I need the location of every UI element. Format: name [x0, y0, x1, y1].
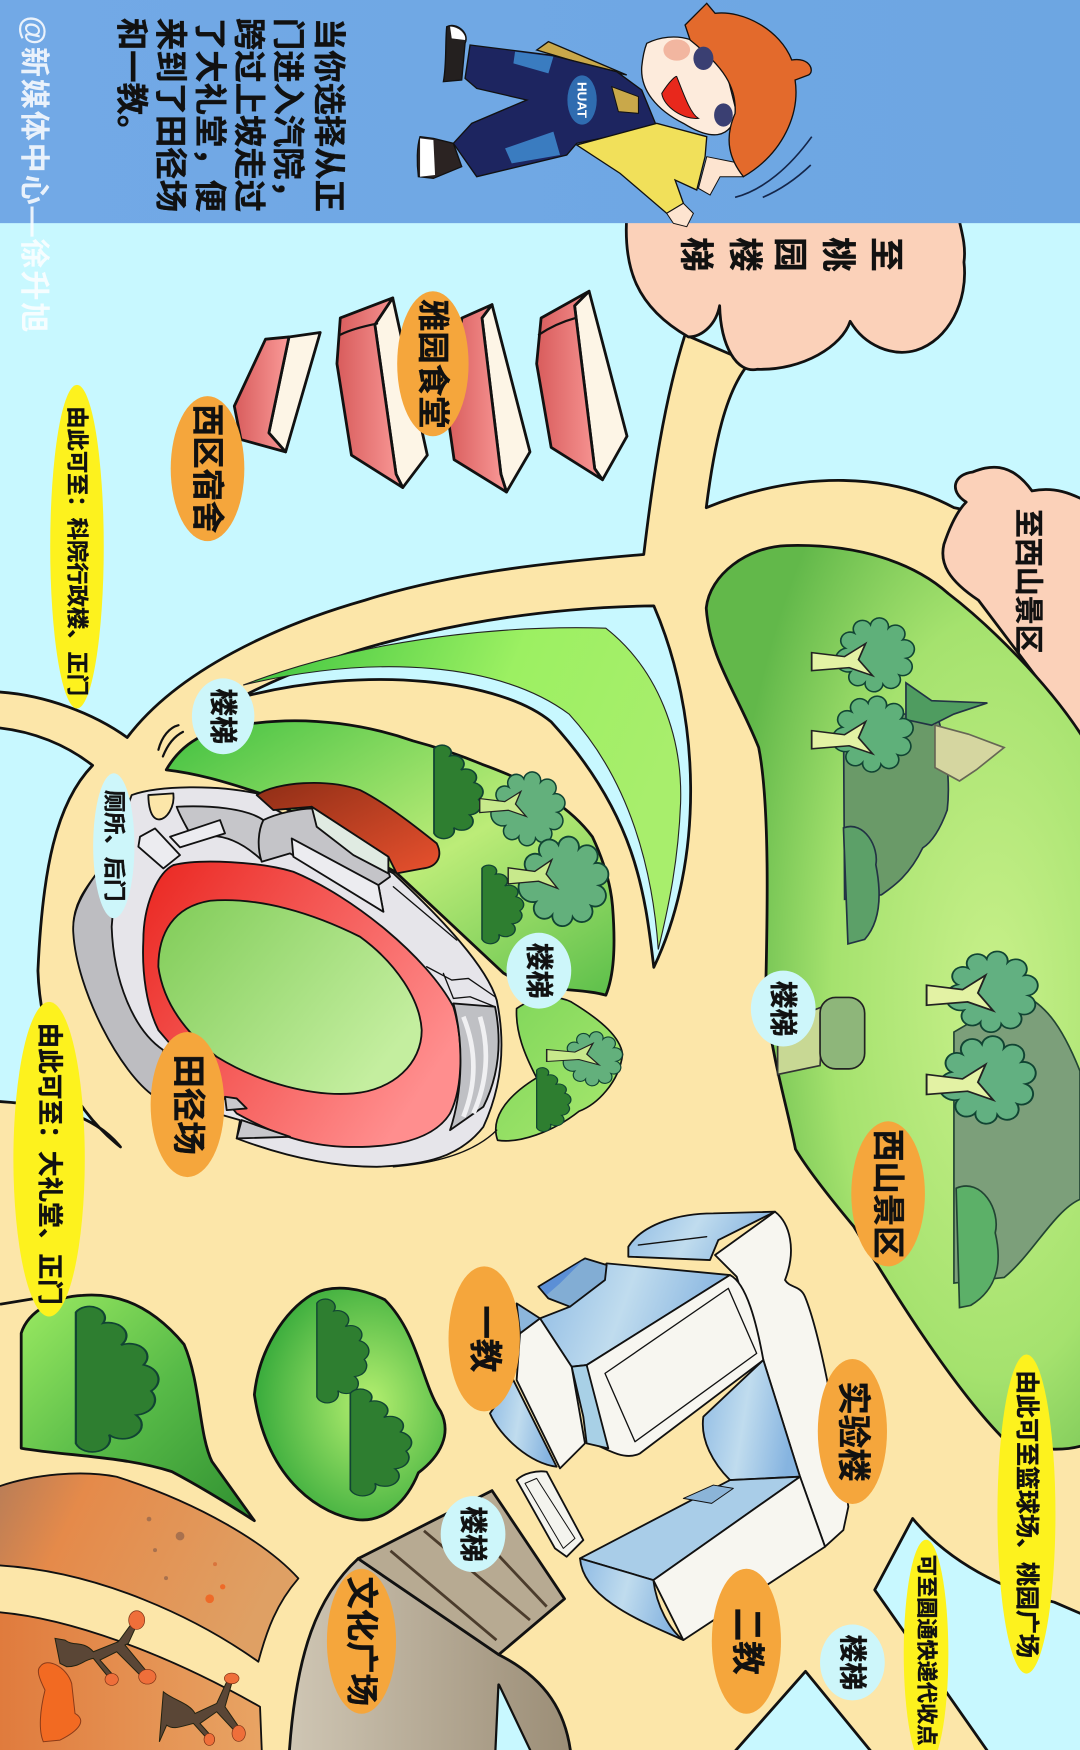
face	[642, 37, 737, 135]
field	[158, 900, 422, 1094]
label: teaching building one: 一教	[466, 1305, 503, 1372]
callout: admin and main gate	[50, 385, 104, 708]
left green leaf	[21, 1295, 254, 1521]
label: culture plaza	[327, 1569, 396, 1714]
grey upper stand	[177, 806, 263, 860]
logo	[567, 75, 597, 125]
panel side strip	[572, 1365, 608, 1448]
label: stairs near gate	[192, 678, 254, 754]
label: to Taoyuan stairs: 梯	[676, 237, 714, 272]
eyes	[693, 47, 713, 70]
grey outer band	[73, 873, 163, 1097]
stair stump	[778, 997, 865, 1074]
small garden blob	[496, 998, 623, 1141]
gate	[225, 1097, 247, 1110]
band one spots	[147, 1517, 225, 1603]
cheek	[663, 39, 690, 61]
canteen block four	[537, 291, 627, 480]
lower wedge	[237, 1120, 290, 1138]
author credit: @新媒体中心—徐升旭	[17, 16, 50, 332]
label: teaching building one	[449, 1266, 520, 1411]
canteen block one	[234, 332, 320, 452]
label: to Taoyuan stairs: 至	[866, 237, 904, 272]
main frame blue	[540, 1263, 730, 1367]
header text	[114, 18, 347, 212]
callout: basketball court and Taoyuan plaza: 由此可至篮球场、桃园广场	[1013, 1370, 1040, 1658]
hill one	[843, 714, 948, 899]
label: Xishan scenic: 西山景区	[870, 1129, 906, 1259]
label: west dorm: 西区宿舍	[190, 404, 226, 533]
mouth	[662, 76, 698, 118]
label: teaching building two: 二教	[728, 1608, 765, 1675]
leaf bush	[76, 1307, 159, 1452]
sky region bottom right	[875, 1518, 1080, 1750]
science building	[490, 1212, 848, 1640]
toilet nub	[148, 793, 174, 819]
garden bushes	[317, 1299, 412, 1496]
stadium	[73, 783, 501, 1167]
culture plaza	[289, 1491, 571, 1750]
vent	[683, 1485, 733, 1503]
blob trees	[537, 1032, 622, 1131]
cap slit	[638, 1237, 707, 1245]
cloud: to Xishan scenic area	[943, 467, 1080, 745]
label: teaching building two	[712, 1569, 781, 1714]
crescent garden	[158, 721, 614, 995]
label: Yayuan canteen	[397, 291, 469, 436]
label: to Taoyuan stairs	[676, 237, 904, 272]
right white spine	[715, 1212, 848, 1547]
blue box	[538, 1258, 607, 1307]
canteen block three	[447, 305, 530, 492]
stair lines	[390, 1512, 547, 1640]
label: Yayuan canteen: 雅园食堂	[415, 299, 451, 428]
white block one	[170, 820, 225, 847]
pockets	[505, 52, 560, 163]
panel inner frame	[605, 1288, 757, 1442]
plaza ground	[289, 1559, 571, 1750]
label: Xishan scenic	[851, 1121, 925, 1266]
label: to Taoyuan stairs: 桃	[818, 237, 856, 272]
lower wing top	[580, 1477, 800, 1580]
track	[143, 862, 461, 1147]
header text: 了大礼堂，便	[192, 18, 228, 212]
header text: 跨过上坡走过	[231, 18, 267, 212]
small bump	[843, 827, 879, 944]
label: track field	[151, 1032, 224, 1177]
header text: 当你选择从正	[311, 18, 347, 212]
building strip	[292, 838, 383, 912]
sky region bottom middle	[730, 1671, 876, 1750]
callout: auditorium and main gate	[13, 1002, 85, 1317]
central white panel	[587, 1275, 763, 1456]
label: to Taoyuan stairs: 楼	[725, 237, 763, 272]
pagoda	[935, 725, 1004, 781]
callout: auditorium and main gate: 由此可至：大礼堂、正门	[35, 1023, 64, 1305]
header band	[0, 0, 1080, 223]
left wing white	[517, 1318, 585, 1468]
collar	[612, 87, 638, 113]
label: to Xishan: 至西山景区	[1012, 509, 1045, 654]
plaza inner sky	[495, 1685, 533, 1750]
band one	[0, 1473, 298, 1662]
label: stairs lower right	[820, 1624, 885, 1700]
left wing top	[517, 1303, 540, 1333]
blue box face	[540, 1260, 583, 1295]
building roof	[312, 807, 388, 873]
connection glass	[703, 1360, 800, 1480]
overalls	[453, 45, 657, 177]
grey building	[259, 808, 390, 912]
band two	[0, 1612, 263, 1750]
stand strips	[463, 1017, 486, 1117]
green lens inside	[243, 628, 681, 949]
label: stairs by plaza	[441, 1496, 505, 1572]
lower right grey band	[450, 1003, 499, 1130]
label: stairs lower right: 楼梯	[837, 1635, 868, 1690]
motion lines	[735, 137, 812, 197]
plaza stairs	[358, 1491, 565, 1655]
cyan lens	[241, 606, 691, 967]
label: west dorm	[171, 396, 244, 541]
lower wing side	[653, 1477, 825, 1640]
trees	[812, 618, 914, 772]
label: stairs by track: 楼梯	[523, 943, 554, 999]
west hill green area	[706, 545, 1080, 1449]
canteen block two	[337, 298, 427, 488]
callout: YTO parcel point	[904, 1540, 948, 1750]
trees two	[927, 951, 1038, 1124]
label: stairs by hill: 楼梯	[768, 981, 799, 1036]
orange shrub	[38, 1663, 81, 1742]
left wing glass	[490, 1380, 557, 1467]
orange bands with decoration	[0, 1473, 298, 1750]
callout: YTO parcel point: 可至圆通快递代收点	[915, 1555, 939, 1745]
callout: basketball court and Taoyuan plaza	[997, 1354, 1055, 1674]
small white shelter	[517, 1471, 583, 1557]
end glass	[580, 1558, 683, 1640]
upper right strips	[393, 887, 495, 1007]
label: lab building: 实验楼	[834, 1381, 871, 1482]
jacket	[577, 123, 707, 213]
outer stand	[73, 787, 501, 1167]
callout: admin and main gate: 由此可至：科院行政楼、正门	[64, 406, 90, 696]
label: stairs by hill	[751, 971, 816, 1047]
round garden	[254, 1288, 445, 1520]
claws	[105, 1611, 245, 1745]
label: stairs by track	[507, 933, 571, 1009]
label: stairs by plaza: 楼梯	[458, 1506, 489, 1562]
top cap	[628, 1212, 775, 1260]
cloud: to Taoyuan stairs	[626, 212, 965, 370]
label: toilet and back gate: 厕所、后门	[101, 790, 126, 901]
header text: 门进入汽院，	[270, 18, 306, 212]
sky region top	[0, 212, 1080, 737]
bag	[537, 42, 627, 75]
stair tick marks	[158, 725, 183, 756]
sky region left	[0, 727, 120, 1147]
label: stairs near gate: 楼梯	[208, 688, 239, 744]
road edge line	[393, 1130, 497, 1167]
white block two	[138, 828, 180, 868]
character	[417, 3, 812, 227]
brown hill	[257, 783, 439, 873]
label: toilet and back gate	[93, 773, 134, 918]
shoes	[443, 25, 466, 82]
crescent trees	[434, 745, 608, 944]
hair	[685, 3, 811, 177]
label: to Taoyuan stairs: 园	[770, 237, 808, 272]
branch two	[159, 1682, 243, 1742]
branch one	[55, 1623, 148, 1677]
logo: HUAT	[575, 82, 590, 118]
label: culture plaza: 文化广场	[343, 1577, 379, 1706]
hill two	[954, 993, 1080, 1283]
label: lab building	[818, 1359, 887, 1504]
header text: 和一教。	[114, 18, 150, 147]
label: track field: 田径场	[169, 1054, 206, 1155]
road edge stroke	[0, 1299, 33, 1304]
bush on hill two	[956, 1186, 998, 1308]
header text: 来到了田径场	[153, 18, 189, 212]
hands	[667, 157, 743, 227]
pine	[906, 683, 987, 725]
